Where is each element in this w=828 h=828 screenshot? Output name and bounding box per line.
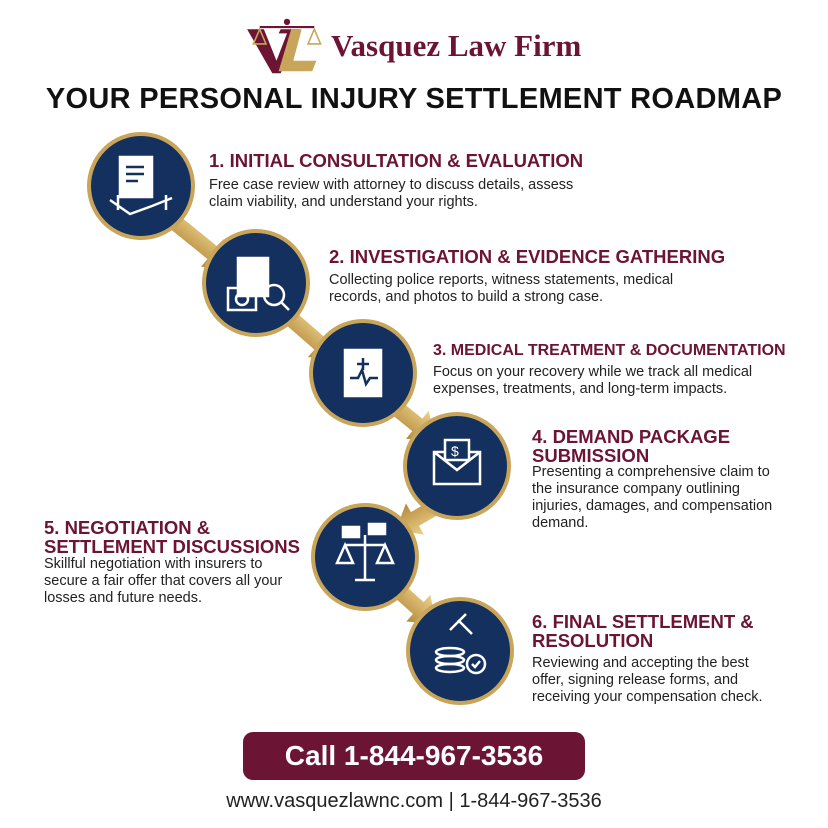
text 4: Presenting a comprehensive claim to the insurance company outlining injuries, damages, and compensation demand. — [532, 464, 772, 531]
icons — [110, 157, 485, 673]
text 5: Skillful negotiation with insurers to secure a fair offer that covers all your losses and future needs. — [44, 556, 282, 606]
heading 6: 6. FINAL SETTLEMENT & RESOLUTION — [532, 611, 754, 651]
text 1: Free case review with attorney to discuss details, assess claim viability, and understand your rights. — [209, 177, 573, 210]
circles — [89, 134, 512, 703]
footer: www.vasquezlawnc.com | 1-844-967-3536 — [226, 790, 602, 812]
logo — [247, 18, 581, 74]
heading 5: 5. NEGOTIATION & SETTLEMENT DISCUSSIONS — [44, 517, 300, 557]
heading 4: 4. DEMAND PACKAGE SUBMISSION — [532, 426, 730, 466]
icons: $ — [451, 443, 459, 459]
title: YOUR PERSONAL INJURY SETTLEMENT ROADMAP — [46, 83, 782, 115]
heading 2: 2. INVESTIGATION & EVIDENCE GATHERING — [329, 246, 725, 267]
icon: VL scales logo — [247, 18, 322, 74]
text 6: Reviewing and accepting the best offer, signing release forms, and receiving your compensation check. — [532, 655, 763, 705]
heading 3: 3. MEDICAL TREATMENT & DOCUMENTATION — [433, 342, 786, 359]
call button — [243, 732, 585, 780]
text 3: Focus on your recovery while we track all medical expenses, treatments, and long-term impacts. — [433, 364, 752, 397]
heading 1: 1. INITIAL CONSULTATION & EVALUATION — [209, 150, 583, 171]
logo text: Vasquez Law Firm — [331, 28, 581, 63]
arrows — [161, 206, 448, 638]
text 2: Collecting police reports, witness statements, medical records, and photos to build a strong case. — [329, 272, 673, 305]
call button: Call 1-844-967-3536 — [285, 740, 543, 771]
